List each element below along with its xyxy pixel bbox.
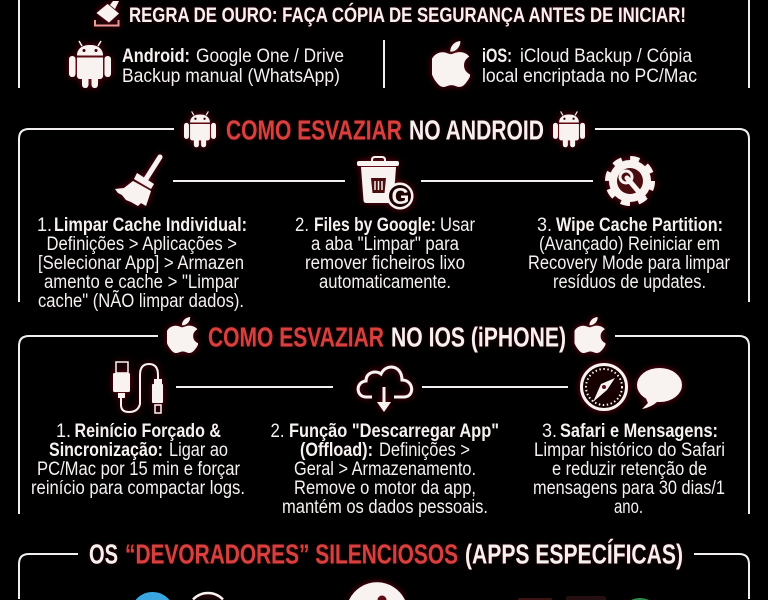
text: step 2 descarregar app: Remove o motor da app,: [294, 478, 476, 499]
text: ios backup: local encriptada no PC/Mac: [482, 66, 697, 87]
text: step 1 limpar cache individual: [37, 215, 247, 312]
text: step 2 files by google: a aba "Limpar" para: [311, 234, 459, 255]
heading: como esvaziar no android: COMO ESVAZIAR: [226, 114, 402, 146]
text: step 3 safari e mensagens: ano.: [614, 497, 643, 518]
text: step 1 reinicio forcado: 1.: [56, 421, 71, 442]
icon: android: [69, 41, 111, 88]
icon: cloud download: [358, 367, 412, 412]
text: step 2 files by google: remover ficheiros lixo: [305, 253, 465, 274]
text: step 2 files by google: 2.: [295, 215, 309, 236]
text: step 2 descarregar app: (Offload):: [300, 440, 373, 461]
panel: golden rule backup: [19, 0, 749, 88]
icon: apple left: [166, 317, 198, 353]
icon: dark apps: [518, 596, 649, 600]
text: step 1 reinicio forcado: PC/Mac por 15 min e forçar: [37, 459, 241, 480]
heading: como esvaziar no ios: COMO ESVAZIAR: [208, 322, 384, 352]
text: step 1 reinicio forcado: Sincronização:: [49, 440, 163, 461]
heading: como esvaziar no android: NO ANDROID: [409, 114, 544, 146]
text: ios backup: [482, 46, 697, 87]
icon: usb cable: [113, 362, 163, 413]
text: step 1 reinicio forcado: [31, 421, 245, 499]
text: step 3 safari e mensagens: e reduzir retenção de: [552, 459, 707, 480]
icon: apple: [430, 41, 471, 87]
icon: apple right: [573, 317, 606, 353]
text: step 3 safari e mensagens: Limpar histórico do Safari: [534, 440, 725, 461]
text: step 1 limpar cache individual: Limpar Cache Individual:: [54, 215, 247, 236]
text: step 2 descarregar app: mantém os dados pessoais.: [282, 497, 488, 518]
icon: android left: [184, 111, 216, 147]
text: step 1 limpar cache individual: amento e cache > "Limpar: [44, 272, 240, 293]
heading: como esvaziar no ios: NO IOS (iPHONE): [391, 322, 566, 352]
icon: gear with wrench: [608, 159, 652, 203]
icon: trash with google badge: G: [392, 183, 409, 209]
text: android backup: Android:: [122, 46, 190, 67]
text: step 1 reinicio forcado: reinício para compactar logs.: [31, 478, 245, 499]
heading: como esvaziar no ios: [208, 322, 566, 352]
text: step 1 limpar cache individual: Definições > Aplicações >: [46, 234, 237, 255]
panel: android: [19, 111, 749, 312]
text: step 2 files by google: Files by Google:: [314, 215, 436, 236]
text: step 3 wipe cache partition: (Avançado) Reiniciar em: [539, 234, 720, 255]
text: step 2 descarregar app: [270, 421, 499, 518]
text: step 3 wipe cache partition: 3.: [537, 215, 552, 236]
heading: os devoradores silenciosos: (APPS ESPECÍFICAS): [465, 538, 683, 570]
text: ios backup: iCloud Backup / Cópia: [520, 46, 692, 67]
text: step 3 wipe cache partition: [528, 215, 731, 293]
icon: broom: [115, 157, 160, 206]
text: step 3 safari e mensagens: [533, 421, 725, 518]
icon: white ring app: [193, 593, 223, 600]
text: step 1 limpar cache individual: [Selecionar App] > Armazen: [38, 253, 244, 274]
heading: os devoradores silenciosos: OS: [89, 538, 118, 570]
icon: backup tray: [95, 1, 119, 26]
icon: trash with google badge: [357, 157, 414, 210]
text: ios backup: iOS:: [482, 46, 512, 67]
icon: message bubble: [637, 368, 682, 409]
text: android backup: [122, 46, 344, 87]
text: step 2 descarregar app: Definições >: [379, 440, 470, 461]
text: step 1 limpar cache individual: cache" (NÃO limpar dados).: [38, 290, 244, 312]
text: step 3 wipe cache partition: Wipe Cache Partition:: [556, 215, 723, 236]
text: step 2 descarregar app: Função "Descarregar App": [289, 421, 499, 442]
icon: central white app: [349, 582, 405, 600]
heading: os devoradores silenciosos: “DEVORADORES” SILENCIOSOS: [125, 538, 458, 570]
text: step 3 safari e mensagens: Safari e Mensagens:: [560, 421, 718, 442]
icon: android right: [553, 111, 585, 147]
text: android backup: Backup manual (WhatsApp): [122, 66, 340, 87]
text: step 2 descarregar app: Geral > Armazenamento.: [294, 459, 476, 480]
text: step 1 reinicio forcado: Ligar ao: [169, 440, 228, 461]
icon: blue app: [136, 592, 170, 600]
icon: safari compass: [582, 364, 626, 410]
text: step 2 files by google: [295, 215, 476, 293]
text: step 2 files by google: automaticamente.: [319, 272, 451, 293]
text: step 2 descarregar app: 2.: [270, 421, 284, 442]
text: step 1 limpar cache individual: 1.: [37, 215, 52, 236]
text: step 3 wipe cache partition: resíduos de updates.: [553, 272, 706, 293]
text: android backup: Google One / Drive: [196, 46, 344, 67]
text: step 2 files by google: Usar: [440, 215, 476, 236]
panel: ios: [19, 317, 749, 518]
panel: silent devourers: [19, 538, 749, 600]
text: step 3 safari e mensagens: 3.: [542, 421, 557, 442]
text: step 1 reinicio forcado: Reinício Forçado &: [74, 421, 221, 442]
text: step 3 safari e mensagens: mensagens para 30 dias/1: [533, 478, 725, 499]
text: step 3 wipe cache partition: Recovery Mode para limpar: [528, 253, 731, 274]
